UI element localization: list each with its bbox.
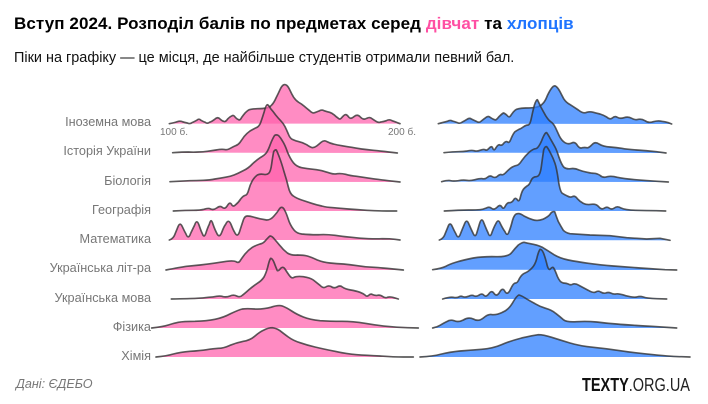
title: Вступ 2024. Розподіл балів по предметах серед дівчат та хлопців xyxy=(14,14,574,33)
subject labels: Математика xyxy=(80,232,152,246)
subject labels xyxy=(50,115,152,363)
subject labels: Біологія xyxy=(104,174,151,188)
subject labels: Географія xyxy=(92,203,151,217)
axis labels: 200 б. xyxy=(388,126,416,138)
subject labels: Фізика xyxy=(113,320,152,334)
axis labels: 100 б. xyxy=(160,126,188,138)
source note: Дані: ЄДЕБО xyxy=(14,377,93,391)
logo: TEXTY.ORG.UA xyxy=(582,375,690,395)
subject labels: Історія України xyxy=(63,144,151,158)
chart: boys ridgeline xyxy=(420,86,690,357)
subject labels: Українська мова xyxy=(55,291,152,305)
axis labels xyxy=(160,126,416,138)
subject labels: Хімія xyxy=(121,349,151,363)
chart: girls ridgeline xyxy=(152,85,418,357)
subject labels: Українська літ-ра xyxy=(50,261,152,275)
subject labels: Іноземна мова xyxy=(65,115,152,129)
subtitle: Піки на графіку — це місця, де найбільше студентів отримали певний бал. xyxy=(14,50,514,66)
